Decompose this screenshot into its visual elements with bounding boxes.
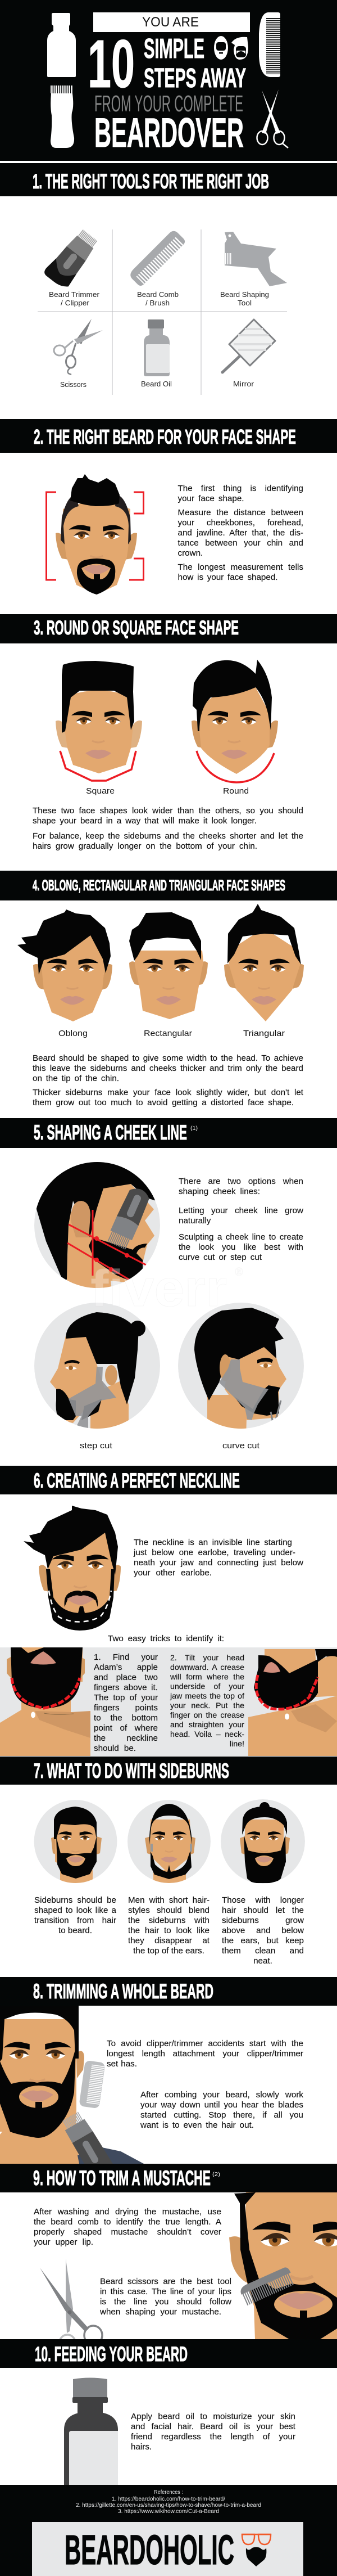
text: cheek line options	[179, 1177, 303, 1262]
text: cheek line options: Sculpting a cheek line to create	[179, 1232, 303, 1242]
label: round: Round	[223, 786, 249, 796]
title: simple: SIMPLE	[144, 34, 204, 64]
text: trick one: 1. Find your	[94, 1652, 158, 1662]
text: identifying face shape: your face shape.	[177, 494, 244, 503]
icon: scissors	[54, 319, 103, 375]
text: sideburns column two	[128, 1895, 210, 1956]
text: mustache scissors: in this case. The line of your lips	[100, 2287, 231, 2296]
illustration: trimming whole beard	[0, 2006, 144, 2176]
watermark: ®	[235, 1266, 243, 1278]
text: sideburns column one: Sideburns should be	[34, 1895, 116, 1905]
illustration: face measurement	[46, 474, 144, 595]
text: neckline definition: your other earlobe.	[134, 1568, 212, 1578]
text: trick one	[94, 1652, 158, 1753]
icon: beard oil bottle	[64, 2378, 118, 2486]
text: trick two: underside of your	[170, 1682, 244, 1691]
illustration: long hair sideburns	[221, 1799, 305, 1884]
text: round or square advice: hairs grow gradually longer on the bottom of your chin.	[33, 841, 257, 851]
text: oblong advice: Thicker sideburns make your face look slightly wider, but don't let	[33, 1088, 303, 1097]
heading 10	[0, 2339, 337, 2368]
text: round or square advice: These two face shapes look wider than the others, so you should	[33, 806, 303, 816]
icon: bearded face	[214, 36, 228, 60]
text: combing: started cutting. Stop there, if all you	[140, 2110, 303, 2120]
text: sideburns column one: shaped to look like a	[34, 1906, 116, 1915]
text: sideburns column two: they disappear at	[128, 1936, 210, 1945]
label: mirror: Mirror	[233, 380, 254, 388]
text: combing: After combing your beard, slowly work	[140, 2090, 303, 2100]
illustration: transition sideburns	[34, 1800, 117, 1884]
text: trick two: head. Voila – neck-	[170, 1730, 244, 1739]
text: trick one: fingers above it.	[94, 1683, 158, 1692]
text: mustache comb: After washing and drying the mustache, use	[34, 2207, 221, 2217]
text: identifying face shape: how is your face shaped.	[177, 573, 277, 582]
text: sideburns column three: hair should let the	[222, 1906, 304, 1915]
text: oblong advice: on the tip of the chin.	[33, 1074, 119, 1083]
label: comb: / Brush	[145, 299, 170, 307]
text: neckline definition: The neckline is an invisible line starting	[134, 1538, 292, 1547]
clipper	[108, 1185, 152, 1245]
text: trick two: downward. A crease	[170, 1663, 244, 1672]
text: sideburns column one: to beard.	[58, 1926, 92, 1935]
label: shaping tool: Tool	[238, 299, 252, 307]
text: clipper length: set has.	[107, 2059, 137, 2069]
text: round or square advice	[33, 806, 303, 851]
watermark: fiverr	[90, 1260, 227, 1317]
text: beard oil: friend regardless the length of your	[131, 2432, 295, 2442]
illustration: triangular face	[224, 904, 304, 1021]
heading 3	[0, 614, 337, 643]
label: shaping tool: Beard Shaping	[220, 290, 269, 299]
text: sideburns column two: Men with short hair-	[128, 1895, 210, 1905]
references: 1. https://beardoholic.com/how-to-trim-beard/	[112, 2496, 225, 2502]
heading 1	[0, 163, 337, 196]
references: 3. https://www.wikihow.com/Cut-a-Beard	[118, 2509, 219, 2515]
text: trick two: will form where the	[170, 1673, 244, 1682]
illustration: mustache with comb	[229, 2192, 337, 2339]
text: trick one: should be.	[94, 1744, 136, 1753]
icon: mustache face	[231, 37, 248, 60]
heading 10: 10. FEEDING YOUR BEARD	[35, 2343, 188, 2366]
title: steps away: STEPS AWAY	[144, 64, 246, 93]
icon: scissors	[257, 89, 288, 148]
heading 5: 5. SHAPING A CHEEK LINE	[34, 1121, 187, 1144]
text: clipper length	[107, 2039, 303, 2069]
text: identifying face shape: Measure the distance between	[177, 508, 303, 517]
text: sideburns column three: Those with longer	[222, 1895, 304, 1905]
logo panel	[32, 2522, 303, 2576]
text: trick one: fingers points	[94, 1703, 158, 1713]
text: neckline definition: neath your jaw and connecting just below	[134, 1558, 303, 1568]
label: curve cut: curve cut	[222, 1441, 260, 1451]
text: round or square advice: For balance, keep the sideburns and the cheeks shorter and let the	[33, 831, 303, 841]
illustration: step cut	[34, 1303, 160, 1440]
text: beard oil: hairs.	[131, 2442, 152, 2452]
text: oblong advice: Beard should be shaped to give some width to the head. To achieve	[33, 1053, 303, 1063]
label: oblong: Oblong	[58, 1029, 88, 1038]
you are box: YOU ARE	[142, 15, 199, 30]
text: sideburns column three: them clean and	[222, 1946, 304, 1956]
heading 9: (2)	[212, 2172, 220, 2178]
label: step cut: step cut	[80, 1441, 113, 1451]
icon: beard comb	[128, 229, 186, 287]
illustration: curve cut	[178, 1303, 304, 1440]
label: beard oil: Beard Oil	[141, 380, 172, 388]
text: identifying face shape: tance between your chin and	[177, 538, 303, 548]
text: cheek line options: Letting your cheek line grow	[179, 1206, 303, 1215]
shirt	[78, 2146, 144, 2164]
you are box	[93, 12, 250, 32]
text: trick one: The top of your	[94, 1693, 158, 1703]
label: trimmer: Beard Trimmer	[49, 290, 100, 299]
label: trimmer: / Clipper	[61, 299, 90, 307]
text: oblong advice: them grow out too much to avoid getting a distorted face shape.	[33, 1098, 294, 1107]
footer	[0, 2485, 337, 2576]
text: mustache scissors: is the line you should follow	[100, 2297, 231, 2307]
brackets	[46, 492, 144, 580]
text: cheek line options: There are two options when	[179, 1177, 303, 1186]
icon: shaping tool	[225, 232, 287, 286]
text: identifying face shape	[177, 484, 303, 582]
illustration: round face	[192, 660, 278, 782]
text: trick two: line!	[230, 1740, 244, 1749]
text: sideburns column three: above and below	[222, 1926, 304, 1935]
heading 4	[0, 871, 337, 900]
text: identifying face shape: and jawline. After that, the dis-	[177, 528, 303, 538]
text: trick two	[170, 1654, 245, 1749]
text: beard oil	[131, 2412, 295, 2452]
text: sideburns column three: neat.	[253, 1956, 272, 1966]
heading 9: 9. HOW TO TRIM A MUSTACHE	[33, 2167, 211, 2190]
text: trick two: 2. Tilt your head	[170, 1654, 244, 1663]
label: square: Square	[86, 786, 115, 796]
references: 2. https://gillette.com/en-us/shaving-tips/how-to-shave/how-to-trim-a-beard	[76, 2502, 261, 2509]
heading 2	[0, 419, 337, 453]
icon: comb	[79, 2060, 106, 2109]
text: oblong advice	[33, 1053, 303, 1107]
text: identifying face shape: The longest measurement tells	[177, 562, 303, 572]
icon: comb	[259, 12, 280, 77]
label: comb	[137, 290, 179, 307]
text: sideburns column three: sideburns grow	[222, 1916, 304, 1925]
text: mustache comb	[34, 2207, 221, 2247]
text: trick two: jaw meets the top of	[170, 1692, 244, 1701]
text: beard oil: and facial hair. Beard oil is your best	[131, 2422, 295, 2431]
label: rectangular: Rectangular	[144, 1029, 192, 1038]
illustration: neckline face	[24, 1506, 121, 1631]
text: neckline definition: just below one earlobe, traveling under-	[134, 1548, 295, 1557]
references: References :	[154, 2489, 183, 2496]
text: identifying face shape: crown.	[177, 548, 203, 558]
text: trick two: finger on the crease	[170, 1711, 244, 1720]
text: cheek line options: shaping cheek lines:	[179, 1187, 260, 1196]
heading 5	[0, 1118, 337, 1148]
text: round or square advice: shape your beard in a way that will make it look longer.	[33, 816, 257, 826]
text: identifying face shape: The first thing is identifying	[177, 484, 303, 493]
text: cheek line options: the look you like best with	[179, 1242, 303, 1252]
text: sideburns column three: the ears, but keep	[222, 1936, 304, 1945]
text: combing	[140, 2090, 303, 2130]
text: trick one: Adam’s apple	[94, 1663, 158, 1672]
illustration: oblong face	[17, 909, 112, 1021]
text: cheek line options: naturally	[179, 1216, 211, 1226]
icon: beard	[246, 2547, 266, 2566]
heading 5: (1)	[190, 1125, 198, 1132]
references	[76, 2489, 261, 2515]
illustration: rectangular face	[129, 912, 208, 1019]
text: trick one: point of where	[94, 1723, 158, 1733]
icon: mirror	[222, 319, 275, 372]
photo: tilted head	[248, 1649, 337, 1756]
text: trick two: and straighten your	[170, 1721, 244, 1730]
label: triangular: Triangular	[243, 1029, 285, 1038]
photo: adam's apple	[0, 1647, 90, 1756]
icon: beard trimmer	[43, 229, 99, 291]
icon: clipper	[51, 89, 74, 148]
text: cheek line options: curve cut or step cut	[179, 1253, 262, 1262]
heading 8: 8. TRIMMING A WHOLE BEARD	[33, 1980, 213, 2003]
text: mustache comb: your upper lip.	[34, 2237, 93, 2247]
text: clipper length: To avoid clipper/trimmer accidents start with the	[107, 2039, 303, 2048]
text: mustache comb: properly shaped mustache shouldn’t cover	[34, 2227, 221, 2237]
text: trick two: your neck. Put the	[170, 1701, 244, 1710]
text: trick one: to the bottom	[94, 1713, 158, 1723]
text: beard oil: Apply beard oil to moisturize your skin	[131, 2412, 295, 2421]
text: clipper length: longest length attachment your clipper/trimmer	[107, 2049, 303, 2059]
title: 10: 10	[88, 25, 135, 102]
text: combing: your way down until you hear the blades	[140, 2100, 303, 2110]
text: sideburns column one	[34, 1895, 117, 1935]
icon: clipper	[63, 2114, 113, 2176]
text: sideburns column two: styles should blend	[128, 1906, 210, 1915]
illustration: cheek line with clipper	[34, 1159, 160, 1294]
text: mustache comb: the beard comb to identify the true length. A	[34, 2217, 221, 2227]
icon: oil bottle	[47, 13, 76, 77]
text: mustache scissors: Beard scissors are the best tool	[100, 2277, 231, 2286]
text: trick one: the neckline	[94, 1733, 158, 1743]
text: trick one: and place two	[94, 1673, 158, 1682]
label: trimmer	[49, 290, 100, 307]
label: scissors: Scissors	[60, 380, 86, 389]
icon: scissors	[40, 2259, 102, 2350]
text: two easy tricks: Two easy tricks to identify it:	[108, 1634, 224, 1643]
icon: glasses	[242, 2534, 271, 2545]
illustration: square face	[56, 661, 142, 781]
text: neckline definition	[134, 1538, 303, 1578]
label: shaping tool	[220, 290, 269, 307]
text: oblong advice: this leave the sideburns and cheeks thicker and trim only the beard	[33, 1064, 303, 1073]
text: sideburns column two: the hair to look like	[128, 1926, 210, 1935]
icon: beard oil	[144, 319, 170, 376]
text: mustache scissors	[100, 2277, 231, 2317]
text: combing: want is to even the hair out.	[140, 2120, 254, 2130]
text: identifying face shape: your cheekbones, forehead,	[177, 518, 303, 528]
text: sideburns column one: transition from hair	[34, 1916, 116, 1925]
label: comb: Beard Comb	[137, 290, 179, 299]
text: sideburns column three	[222, 1895, 304, 1966]
panel: tools grid	[38, 229, 287, 395]
text: sideburns column two: the sideburns with	[128, 1916, 210, 1925]
hero banner	[0, 0, 337, 161]
panel: two tricks	[0, 1647, 337, 1756]
text: mustache scissors: when shaping your mustache.	[100, 2307, 221, 2317]
text: sideburns column two: the top of the ears.	[133, 1946, 204, 1956]
illustration: short hair sideburns	[127, 1800, 211, 1884]
